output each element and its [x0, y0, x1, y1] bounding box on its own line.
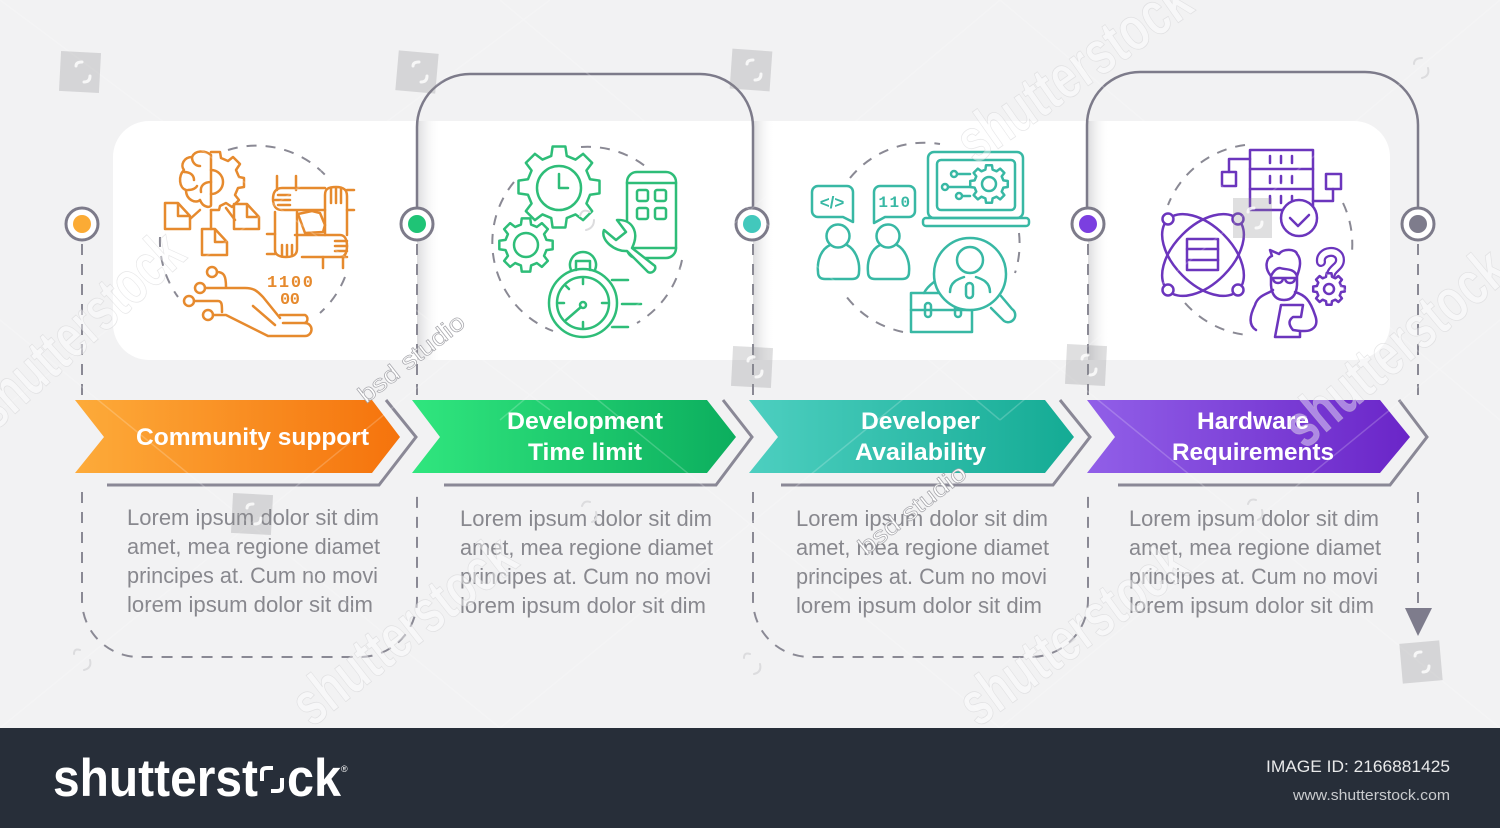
text block: community support description: principes at. Cum no movi: [127, 563, 378, 588]
icon: community support: [160, 146, 354, 336]
icon: community support: 00: [280, 291, 300, 310]
node: step 2: [401, 208, 433, 240]
text block: hardware requirements description: [1129, 506, 1381, 618]
text block: hardware requirements description: lorem ipsum dolor sit dim: [1129, 593, 1374, 618]
text block: community support description: lorem ipsum dolor sit dim: [127, 592, 373, 617]
text block: developer availability description: amet, mea regione diamet: [796, 535, 1049, 560]
arrow banner: developer availability: [749, 400, 1090, 485]
footer image id: IMAGE ID: 2166881425: [1266, 757, 1450, 776]
icon: developer availability: 110: [878, 194, 912, 212]
text block: hardware requirements description: Lorem ipsum dolor sit dim: [1129, 506, 1379, 531]
dashed connector: step 1 to step 2: [82, 244, 417, 657]
icon: hardware requirements: [1147, 145, 1352, 337]
arrow banner: community support: Community support: [136, 424, 369, 451]
watermark overlay: bsd studio: [853, 459, 972, 561]
arrow banner: development time limit: Time limit: [528, 439, 642, 466]
text block: hardware requirements description: principes at. Cum no movi: [1129, 564, 1378, 589]
text block: development time limit description: lorem ipsum dolor sit dim: [460, 593, 706, 618]
icon: developer availability: [812, 143, 1029, 332]
text block: development time limit description: amet, mea regione diamet: [460, 535, 713, 560]
footer logo: ck: [287, 749, 341, 808]
text block: development time limit description: Lorem ipsum dolor sit dim: [460, 506, 712, 531]
arrow banner: hardware requirements: Requirements: [1172, 439, 1334, 466]
arrow banner: development time limit: Development: [507, 408, 663, 435]
node: step 1: [66, 208, 98, 240]
dashed connector: step 3 to step 4: [753, 244, 1088, 657]
panel: white icon band: [113, 121, 1390, 360]
arrow banner: hardware requirements: Hardware: [1197, 408, 1309, 435]
icon: community support: 1100: [267, 274, 313, 293]
solid connector: step 4: [1087, 72, 1418, 207]
watermark overlay: bsd studio: [353, 309, 471, 409]
arrow banner: hardware requirements: [1087, 400, 1427, 485]
text block: developer availability description: Lorem ipsum dolor sit dim: [796, 506, 1048, 531]
text block: developer availability description: lorem ipsum dolor sit dim: [796, 593, 1042, 618]
node: step 4: [1072, 208, 1104, 240]
text block: development time limit description: principes at. Cum no movi: [460, 564, 711, 589]
node: end: [1402, 208, 1434, 240]
arrow banner: developer availability: Availability: [855, 439, 987, 466]
arrow banner: community support: [75, 400, 416, 485]
icon: developer availability: </>: [820, 193, 844, 212]
watermark overlay: shutterstock: [278, 521, 530, 739]
text block: community support description: Lorem ipsum dolor sit dim: [127, 505, 379, 530]
text block: community support description: [127, 505, 380, 617]
footer bar: [0, 728, 1500, 828]
text block: developer availability description: principes at. Cum no movi: [796, 564, 1047, 589]
node: step 3: [736, 208, 768, 240]
dashed arrow: end of flow: [1405, 244, 1432, 636]
solid connector: step 2: [417, 74, 753, 207]
icon: development time limit: [492, 146, 682, 337]
arrow banner: developer availability: Developer: [861, 408, 980, 435]
footer registered mark: ®: [341, 764, 348, 774]
arrow banner: development time limit: [412, 400, 752, 485]
footer website: www.shutterstock.com: [1292, 787, 1450, 804]
text block: hardware requirements description: amet, mea regione diamet: [1129, 535, 1381, 560]
text block: community support description: amet, mea regione diamet: [127, 534, 380, 559]
footer logo: shutterst: [53, 749, 258, 808]
watermark overlay: shutterstock: [946, 528, 1201, 739]
text block: development time limit description: [460, 506, 713, 618]
text block: developer availability description: [796, 506, 1049, 618]
